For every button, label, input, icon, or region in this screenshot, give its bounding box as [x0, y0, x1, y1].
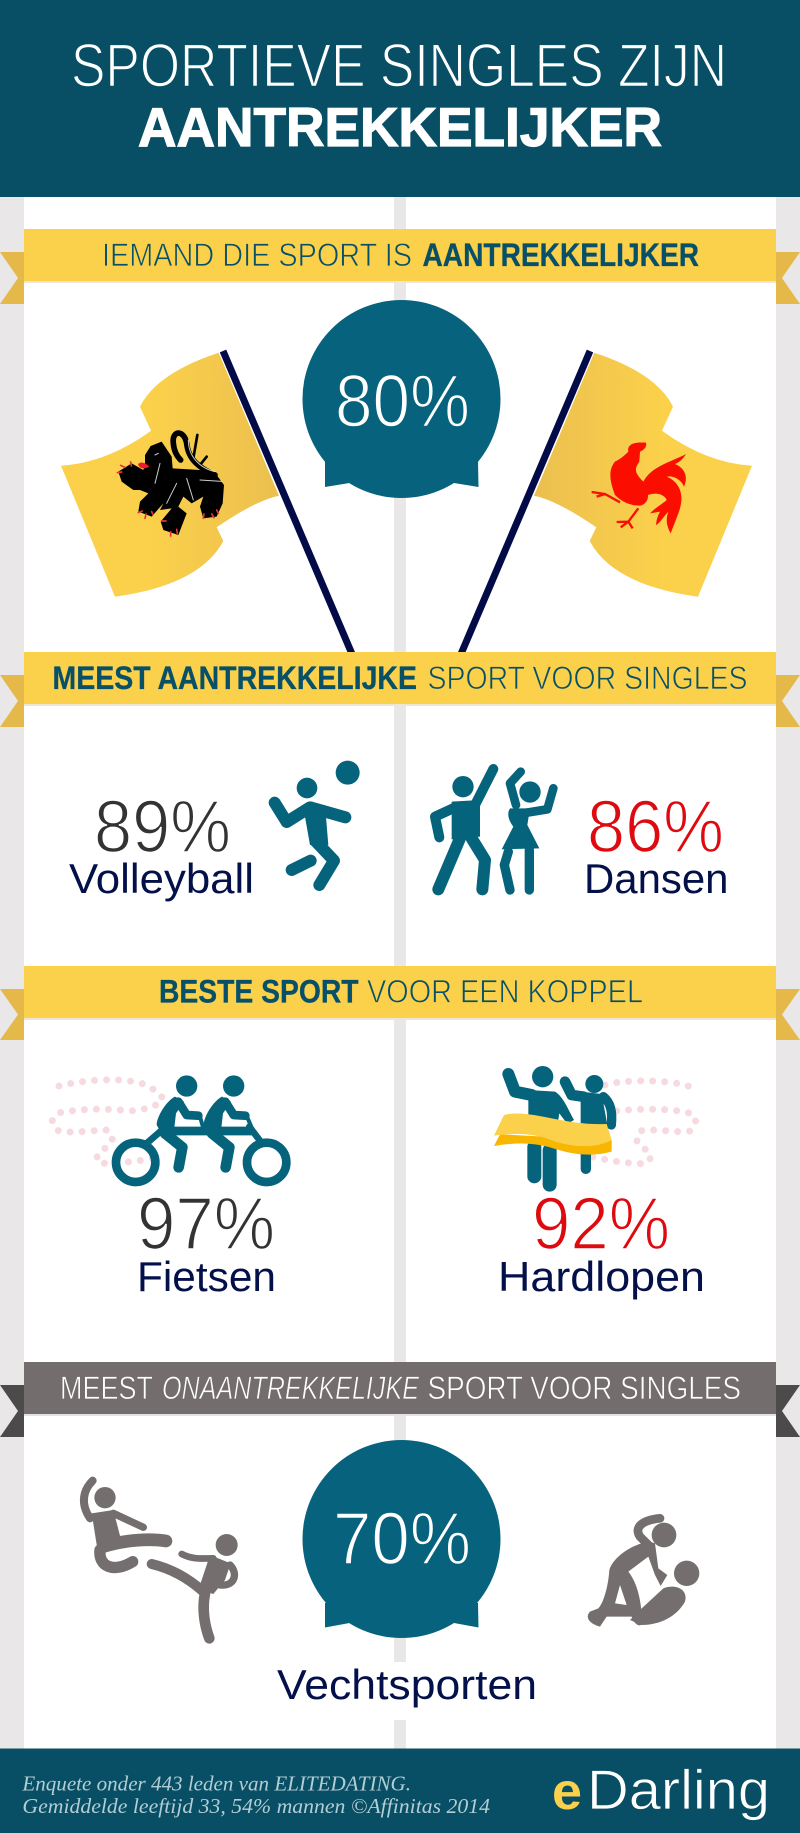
- footer: [0, 1748, 800, 1833]
- stat: hardlopen 92%: [498, 1182, 705, 1300]
- banner: beste sport: [0, 966, 800, 1040]
- banner: meest onaantrekkelijke: ONAANTREKKELIJKE: [162, 1370, 420, 1406]
- banner: meest onaantrekkelijke: [0, 1362, 800, 1437]
- icon: tandem cyclists with hearts: [52, 1075, 286, 1182]
- banner: beste sport: BESTE SPORT: [159, 974, 359, 1010]
- banner: meest onaantrekkelijke: SPORT VOOR SINGLES: [428, 1370, 741, 1406]
- stat: hardlopen 92%: 92%: [532, 1182, 670, 1265]
- flag: Flanders lion: [61, 351, 352, 654]
- footer note: [21, 1772, 491, 1818]
- label: vechtsporten: Vechtsporten: [277, 1661, 537, 1708]
- banner: meest aantrekkelijke: SPORT VOOR SINGLES: [428, 660, 748, 696]
- stat: dansen 86%: Dansen: [584, 855, 728, 902]
- flag: Wallonia rooster: [461, 351, 752, 654]
- stat: dansen 86%: [584, 785, 728, 902]
- icon: runners at finish ribbon with hearts: [494, 1066, 696, 1192]
- stat bubble: 70%: [302, 1440, 500, 1638]
- banner: meest aantrekkelijke: [0, 652, 800, 727]
- logo: eDarling: Darling: [587, 1758, 770, 1821]
- banner: beste sport: VOOR EEN KOPPEL: [367, 974, 643, 1010]
- stat: fietsen 97%: [137, 1182, 276, 1300]
- icon: grappling fighters: [588, 1518, 699, 1627]
- banner: iemand die sport: [0, 229, 800, 304]
- banner: iemand die sport: AANTREKKELIJKER: [422, 237, 699, 273]
- banner: meest onaantrekkelijke: MEEST: [60, 1370, 153, 1406]
- stat: volleyball 89%: Volleyball: [69, 855, 254, 902]
- icon: volleyball player: [275, 761, 360, 885]
- header: title: AANTREKKELIJKER: [138, 96, 662, 158]
- header: title: [0, 0, 800, 197]
- stat: volleyball 89%: 89%: [94, 785, 231, 868]
- stat bubble: 80%: [302, 300, 500, 498]
- stat: hardlopen 92%: Hardlopen: [498, 1253, 705, 1300]
- footer note: Enquete onder 443 leden van ELITEDATING.: [21, 1772, 411, 1796]
- logo: eDarling: e: [552, 1763, 582, 1821]
- banner: iemand die sport: IEMAND DIE SPORT IS: [102, 237, 412, 273]
- icon: kicking fighters: [84, 1481, 238, 1638]
- stat: fietsen 97%: Fietsen: [137, 1253, 276, 1300]
- footer note: Gemiddelde leeftijd 33, 54% mannen ©Affinitas 2014: [22, 1794, 491, 1818]
- icon: dancers: [435, 769, 553, 890]
- banner: meest aantrekkelijke: MEEST AANTREKKELIJKE: [52, 660, 417, 696]
- stat bubble: 70%: 70%: [333, 1497, 471, 1580]
- stat: fietsen 97%: 97%: [137, 1182, 275, 1265]
- stat: dansen 86%: 86%: [587, 785, 724, 868]
- stat bubble: 80%: 80%: [335, 360, 470, 442]
- stat: volleyball 89%: [69, 785, 254, 902]
